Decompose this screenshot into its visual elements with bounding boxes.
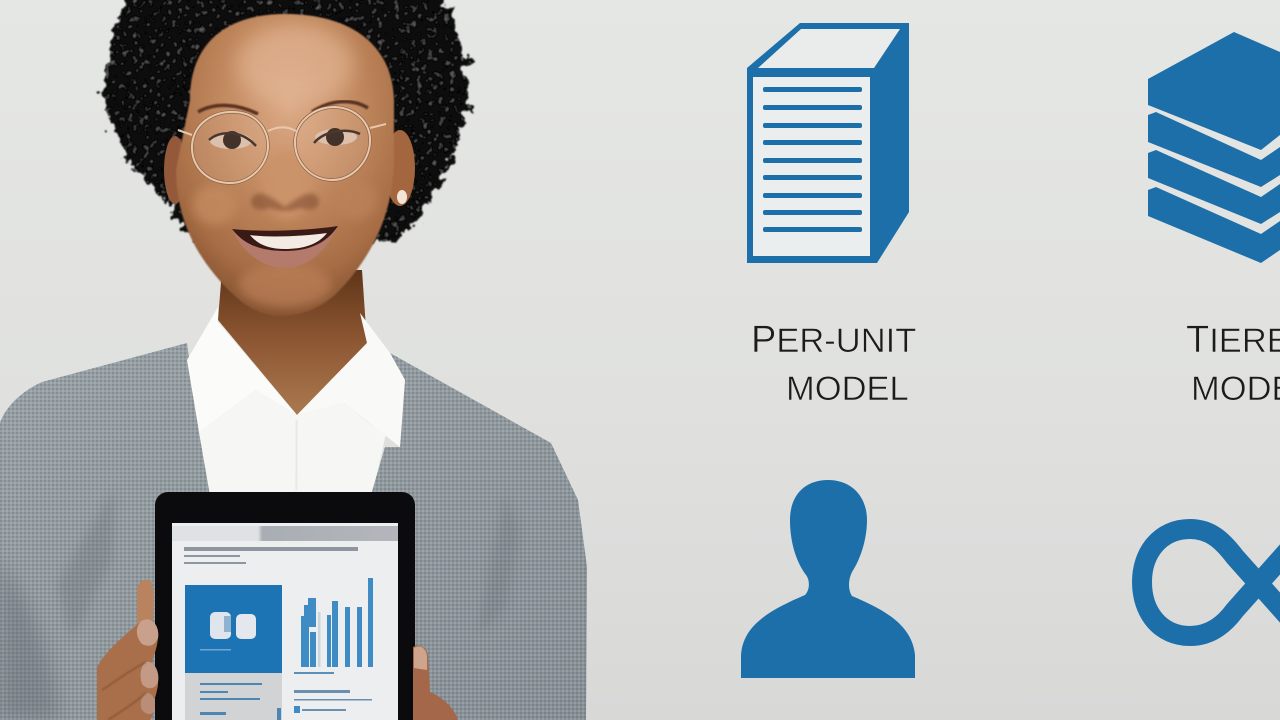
screen bottom panel <box>185 673 282 720</box>
screen blue panel <box>185 585 282 673</box>
nose <box>251 193 319 211</box>
label: per-unit model: PER-UNIT <box>751 319 916 361</box>
screen bar chart <box>294 578 373 674</box>
label: per-unit model: MODEL <box>786 370 909 408</box>
shirt <box>197 425 388 500</box>
label: per-unit model <box>751 319 916 408</box>
tablet screen <box>172 523 398 720</box>
facial shading <box>193 25 377 307</box>
eyes <box>209 128 360 149</box>
icon: infinity <box>1142 529 1280 636</box>
tablet <box>155 492 415 720</box>
photo: woman holding a tablet <box>0 0 600 720</box>
ears and earring <box>164 130 415 206</box>
neck <box>218 270 367 415</box>
mouth <box>232 226 338 268</box>
tablet body <box>155 492 415 720</box>
screen text lines <box>184 547 358 564</box>
icon: server box (per-unit) <box>747 23 909 263</box>
hair <box>104 0 468 240</box>
eyebrows <box>198 102 368 114</box>
shirt collar <box>187 307 405 495</box>
right hand <box>413 646 458 720</box>
screen footer text <box>294 690 372 713</box>
glasses <box>178 107 386 183</box>
jacket <box>0 340 600 720</box>
icon: layered stack (tiered) <box>1148 32 1280 263</box>
face <box>176 14 394 316</box>
label: tiered model <box>1186 319 1280 408</box>
left hand <box>97 580 158 720</box>
icon: person <box>741 480 915 678</box>
